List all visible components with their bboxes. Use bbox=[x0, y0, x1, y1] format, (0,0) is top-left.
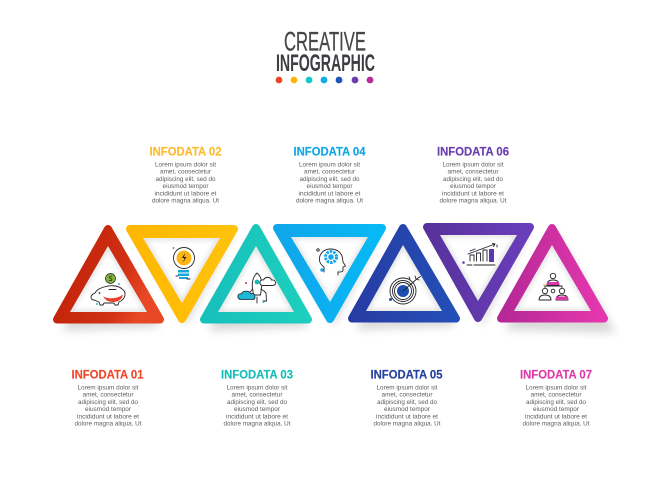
triangle 7: pink bbox=[501, 228, 604, 318]
triangle 4: blue bbox=[277, 228, 382, 319]
infodata 01: eiusmod tempor bbox=[85, 406, 132, 413]
icon: head with gear bbox=[317, 249, 346, 275]
infodata 02: Lorem ipsum dolor sit bbox=[155, 162, 216, 168]
infodata 05: incididunt ut labore et bbox=[376, 413, 438, 420]
infodata 03: dolore magna aliqua. Ut bbox=[224, 420, 291, 428]
infodata 02: dolore magna aliqua. Ut bbox=[152, 198, 219, 204]
infodata 07: incididunt ut labore et bbox=[525, 413, 587, 420]
infodata 03: incididunt ut labore et bbox=[226, 413, 288, 420]
infodata 05: Lorem ipsum dolor sit bbox=[376, 384, 438, 392]
infodata 07: dolore magna aliqua. Ut bbox=[522, 420, 590, 428]
infodata 06: Lorem ipsum dolor sit bbox=[442, 162, 504, 168]
infodata 07: adipiscing elit, sed do bbox=[526, 399, 586, 406]
infodata 05: dolore magna aliqua. Ut bbox=[374, 420, 441, 428]
infodata 02: INFODATA 02 bbox=[150, 144, 222, 158]
infodata 06: adipiscing elit, sed do bbox=[443, 176, 503, 183]
infodata 06: amet, consectetur bbox=[448, 169, 499, 176]
infodata 01 bbox=[72, 368, 144, 428]
infodata 03: eiusmod tempor bbox=[234, 406, 281, 413]
infodata 04: eiusmod tempor bbox=[306, 183, 353, 190]
title bbox=[276, 26, 375, 77]
triangle shadows bbox=[62, 230, 616, 333]
infodata 01: dolore magna aliqua. Ut bbox=[74, 420, 142, 428]
title: CREATIVE bbox=[284, 26, 366, 56]
infodata 05: INFODATA 05 bbox=[370, 368, 443, 382]
infodata 07: amet, consectetur bbox=[530, 392, 582, 399]
infodata 02 bbox=[150, 144, 222, 204]
infodata 07: INFODATA 07 bbox=[520, 368, 592, 382]
infodata 04: incididunt ut labore et bbox=[298, 190, 361, 197]
triangle 6: purple bbox=[427, 227, 530, 318]
infodata 03: adipiscing elit, sed do bbox=[227, 399, 287, 406]
icon: rocket and clouds bbox=[238, 273, 276, 303]
title: INFOGRAPHIC bbox=[276, 50, 375, 77]
infodata 06 bbox=[437, 144, 509, 204]
icon: bar chart with arrow bbox=[462, 244, 497, 265]
infodata 07: Lorem ipsum dolor sit bbox=[526, 384, 587, 392]
infodata 04: dolore magna aliqua. Ut bbox=[296, 198, 363, 204]
infodata 06: eiusmod tempor bbox=[450, 183, 497, 190]
triangle 1: red bbox=[57, 229, 160, 320]
infodata 01: amet, consectetur bbox=[82, 392, 134, 399]
infodata 01: Lorem ipsum dolor sit bbox=[78, 384, 139, 392]
infodata 05: amet, consectetur bbox=[382, 392, 433, 399]
infodata 02: adipiscing elit, sed do bbox=[156, 176, 216, 183]
infodata 04: amet, consectetur bbox=[304, 169, 356, 176]
infodata 04 bbox=[294, 144, 366, 204]
infodata 01: adipiscing elit, sed do bbox=[78, 399, 138, 406]
infodata 06: INFODATA 06 bbox=[437, 144, 509, 158]
triangle 3: teal bbox=[204, 228, 308, 320]
infodata 03: INFODATA 03 bbox=[221, 368, 293, 382]
icon: light bulb bbox=[173, 248, 194, 279]
infodata 04: adipiscing elit, sed do bbox=[300, 176, 360, 183]
infodata 06: dolore magna aliqua. Ut bbox=[440, 198, 507, 204]
infodata 02: incididunt ut labore et bbox=[154, 190, 217, 197]
infodata 02: eiusmod tempor bbox=[162, 183, 209, 190]
title dots bbox=[276, 77, 373, 83]
infodata 04: INFODATA 04 bbox=[294, 144, 366, 158]
infodata 03: amet, consectetur bbox=[232, 392, 283, 399]
icon: target with arrow bbox=[389, 276, 420, 304]
infodata 01: INFODATA 01 bbox=[72, 368, 144, 382]
icon: piggy bank bbox=[91, 274, 125, 305]
infodata 06: incididunt ut labore et bbox=[442, 190, 504, 197]
infodata 04: Lorem ipsum dolor sit bbox=[299, 162, 360, 168]
infodata 07: eiusmod tempor bbox=[533, 406, 580, 413]
infodata 07 bbox=[520, 368, 592, 428]
infodata 03 bbox=[221, 368, 293, 428]
infodata 05: adipiscing elit, sed do bbox=[377, 399, 437, 406]
triangle 2: yellow bbox=[130, 229, 234, 319]
infodata 02: amet, consectetur bbox=[160, 169, 212, 176]
infodata 03: Lorem ipsum dolor sit bbox=[226, 384, 288, 392]
infodata 01: incididunt ut labore et bbox=[77, 413, 139, 420]
triangle 5: navy bbox=[352, 228, 456, 318]
infodata 05: eiusmod tempor bbox=[384, 406, 431, 413]
infodata 05 bbox=[370, 368, 443, 428]
icon: people hierarchy bbox=[539, 273, 568, 300]
